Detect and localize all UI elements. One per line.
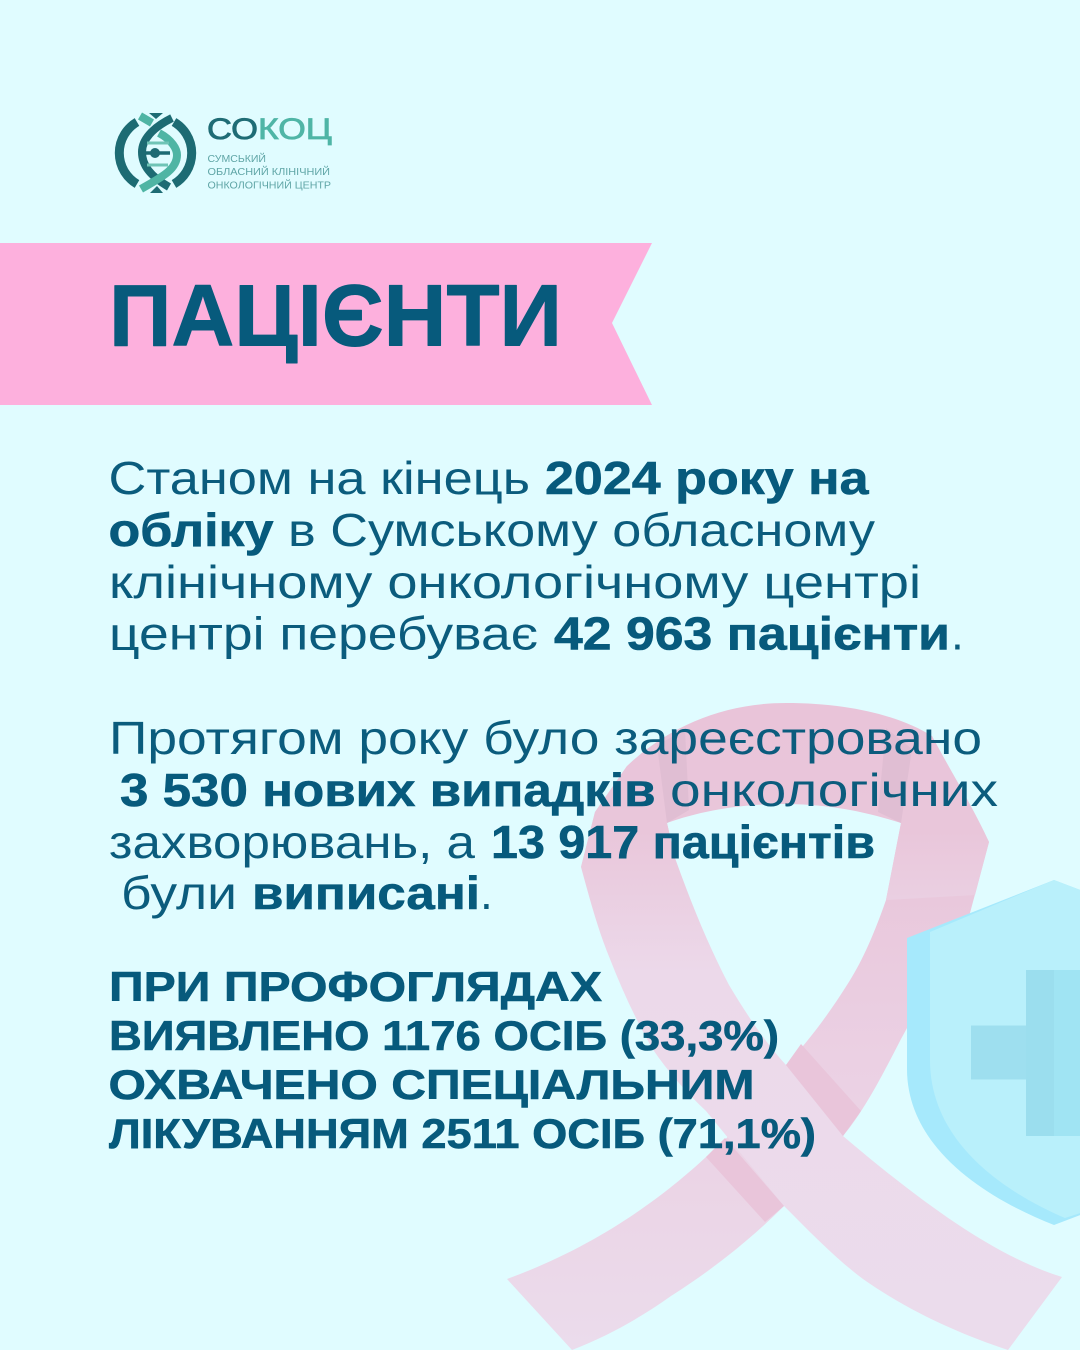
ribbon fold shading left bbox=[657, 730, 689, 823]
callout: screening and treatment stats bbox=[108, 963, 816, 1157]
paragraph: new cases and discharged: виписані bbox=[252, 867, 480, 919]
paragraph: patients on record: 42 963 пацієнти bbox=[554, 608, 950, 660]
logo icon: DNA helix in ring bbox=[119, 113, 192, 193]
logo wordmark bbox=[207, 113, 332, 146]
ribbon fold shading right bbox=[878, 728, 912, 823]
paragraph: new cases and discharged: . bbox=[480, 867, 493, 919]
paragraph: new cases and discharged: захворювань, а bbox=[109, 816, 475, 868]
logo subtitle bbox=[208, 152, 331, 192]
paragraph: patients on record: в Сумському обласному bbox=[288, 504, 875, 556]
paragraph: new cases and discharged: 13 917 пацієнтів bbox=[491, 816, 875, 868]
callout: screening and treatment stats: ПРИ ПРОФОГЛЯДАХ bbox=[109, 963, 602, 1010]
paragraph: patients on record bbox=[108, 452, 964, 660]
ribbon overlap shading upper bbox=[786, 1044, 861, 1136]
icon: medical shield bbox=[907, 880, 1080, 1225]
paragraph: new cases and discharged: 3 530 нових випадків bbox=[120, 764, 656, 816]
paragraph: patients on record: обліку bbox=[108, 504, 274, 556]
paragraph: new cases and discharged: онкологічних bbox=[670, 764, 998, 816]
paragraph: patients on record: Станом на кінець bbox=[108, 452, 530, 504]
paragraph: new cases and discharged: Протягом року було зареєстровано bbox=[109, 712, 982, 764]
paragraph: patients on record: центрі перебуває bbox=[109, 608, 538, 660]
logo bbox=[119, 113, 332, 193]
paragraph: patients on record: клінічному онкологічному центрі bbox=[109, 556, 921, 608]
logo subtitle: ОБЛАСНИЙ КЛІНІЧНИЙ bbox=[208, 165, 330, 178]
ribbon overlap shading lower bbox=[706, 1138, 784, 1222]
title banner bbox=[0, 243, 652, 405]
logo wordmark: КОЦ bbox=[258, 113, 332, 146]
paragraph: patients on record: . bbox=[951, 608, 964, 660]
title: ПАЦІЄНТИ bbox=[109, 268, 562, 364]
paragraph: new cases and discharged bbox=[109, 712, 998, 919]
callout: screening and treatment stats: ЛІКУВАННЯМ 2511 ОСІБ (71,1%) bbox=[109, 1110, 816, 1157]
logo subtitle: ОНКОЛОГІЧНИЙ ЦЕНТР bbox=[208, 178, 331, 192]
callout: screening and treatment stats: ВИЯВЛЕНО 1176 ОСІБ (33,3%) bbox=[109, 1012, 779, 1059]
logo wordmark: СО bbox=[207, 113, 258, 146]
paragraph: patients on record: 2024 року на bbox=[545, 452, 869, 504]
icon: awareness ribbon bbox=[507, 703, 1062, 1350]
shield cross bbox=[971, 970, 1080, 1136]
callout: screening and treatment stats: ОХВАЧЕНО СПЕЦІАЛЬНИМ bbox=[108, 1061, 754, 1108]
logo subtitle: СУМСЬКИЙ bbox=[208, 152, 266, 165]
paragraph: new cases and discharged: були bbox=[121, 867, 237, 919]
